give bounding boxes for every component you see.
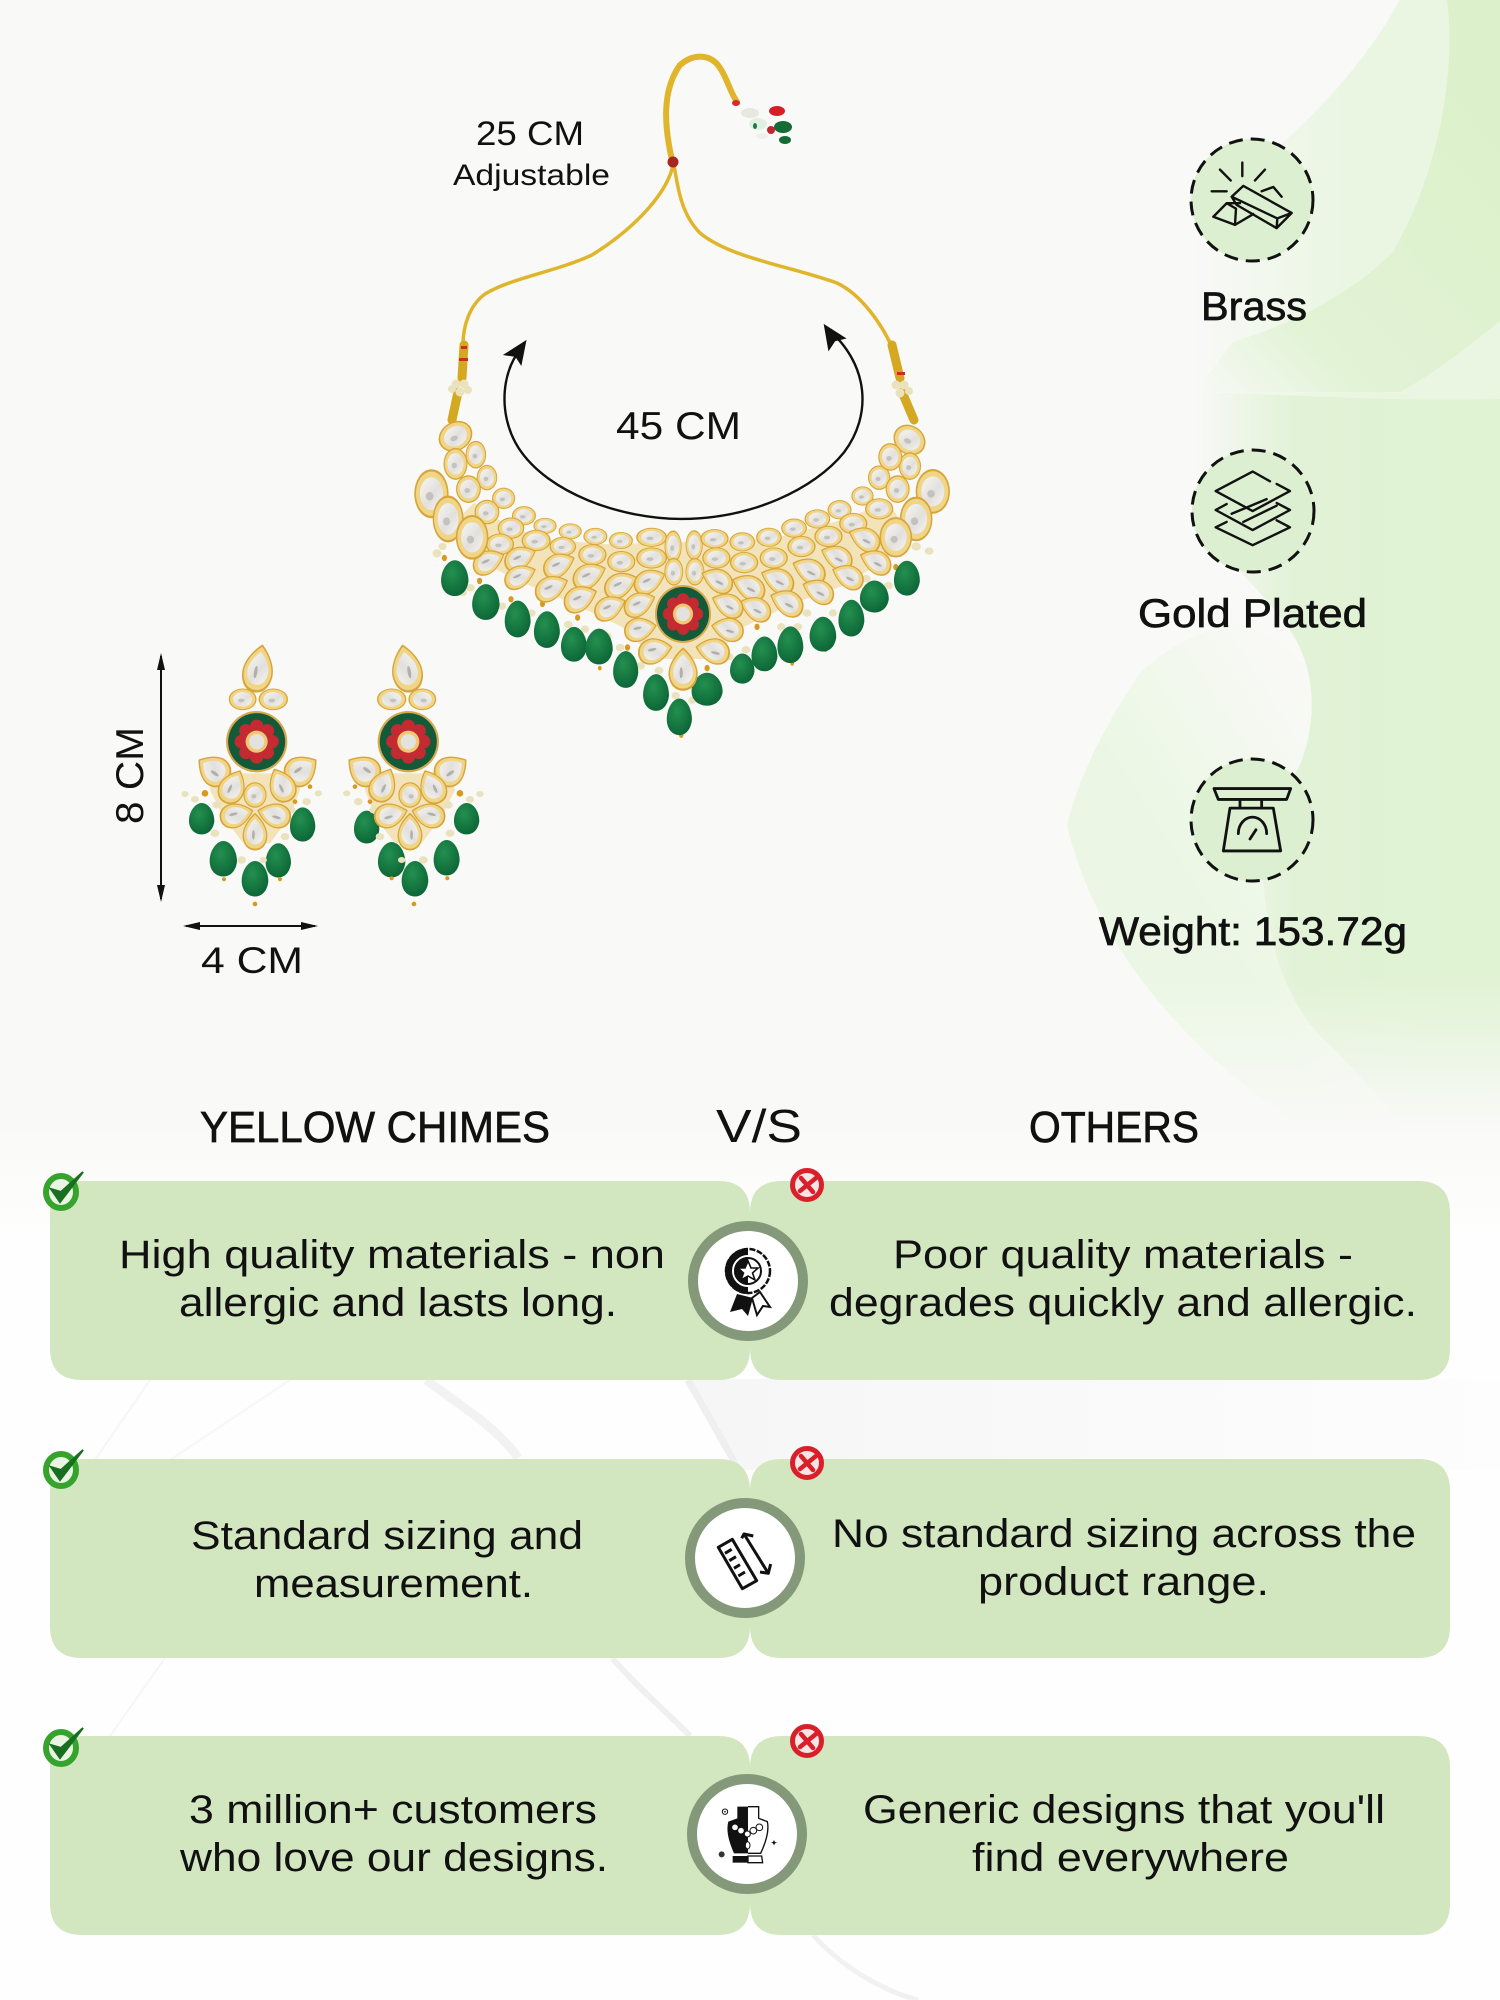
label: 4 CM: 4 CM <box>201 940 303 981</box>
text: no standard sizing <box>832 1512 1416 1604</box>
check icon <box>46 1450 83 1486</box>
cross icon <box>792 1448 822 1478</box>
icon: gold bars <box>1191 139 1313 261</box>
cord tassel <box>732 100 792 144</box>
left earring <box>181 642 325 906</box>
text: no standard sizing: product range. <box>978 1560 1269 1604</box>
icon: ruler and arrow <box>690 1503 800 1613</box>
label: 25 CM: 25 CM <box>476 115 584 153</box>
arrow: 4 CM width <box>183 922 318 930</box>
red slider bead <box>668 156 678 168</box>
comparison row 3 <box>46 1726 1450 1935</box>
arrow: 8 CM height <box>157 653 165 902</box>
icon: layers <box>1192 450 1314 572</box>
text: high quality: High quality materials - non <box>119 1233 665 1277</box>
text: no standard sizing: No standard sizing across the <box>832 1512 1416 1556</box>
cord end pearls <box>448 346 913 398</box>
icon: necklace bust <box>692 1779 802 1889</box>
label: Brass: Brass <box>1201 285 1307 329</box>
text: poor quality: degrades quickly and allergic. <box>829 1281 1417 1325</box>
text: customers <box>179 1788 608 1880</box>
green drop beads <box>441 560 920 735</box>
text: generic designs: find everywhere <box>972 1836 1289 1880</box>
panel: 3 million customers <box>50 1736 750 1935</box>
cross icon <box>792 1170 822 1200</box>
necklace stones (coordinates in scaled group) <box>414 416 950 738</box>
check icon <box>46 1172 83 1208</box>
icon: rosette badge <box>693 1226 803 1336</box>
earrings <box>181 642 484 906</box>
text: customers: 3 million+ customers <box>189 1788 597 1832</box>
text: high quality <box>119 1233 665 1325</box>
heading: V/S: V/S <box>716 1100 802 1152</box>
check icon <box>46 1728 83 1764</box>
necklace with cord, stones and beads <box>414 57 950 738</box>
heading: OTHERS: OTHERS <box>1029 1103 1199 1152</box>
text: generic designs: Generic designs that you'll <box>863 1788 1385 1832</box>
45 CM curved arrow <box>503 324 862 519</box>
comparison row 1 <box>46 1170 1450 1380</box>
label: 45 CM: 45 CM <box>616 405 741 448</box>
text: generic designs <box>863 1788 1385 1880</box>
comparison row 2 <box>46 1448 1450 1658</box>
panel: standard sizing <box>50 1459 750 1658</box>
label: Weight: Weight: 153.72g <box>1099 910 1407 954</box>
heading: YELLOW CHIMES: YELLOW CHIMES <box>200 1103 550 1152</box>
text: poor quality: Poor quality materials - <box>893 1233 1353 1277</box>
text: poor quality <box>829 1233 1417 1325</box>
kundan stones <box>414 416 950 691</box>
cross icon <box>792 1726 822 1756</box>
panel: no standard sizing <box>750 1459 1450 1658</box>
gold backing <box>456 503 911 659</box>
label: 8 CM: 8 CM <box>109 727 152 824</box>
label: Gold Plated: Gold Plated <box>1138 592 1367 636</box>
text: standard sizing <box>191 1514 583 1606</box>
pearls and gold drops <box>433 542 934 738</box>
centre medallion <box>655 585 711 643</box>
lower background swooshes <box>0 1120 1500 2000</box>
right earring <box>340 642 484 906</box>
necklace cord <box>452 57 914 420</box>
label: Adjustable: Adjustable <box>453 159 610 192</box>
text: standard sizing: Standard sizing and <box>191 1514 583 1558</box>
text: high quality: allergic and lasts long. <box>179 1281 617 1325</box>
background green shapes <box>1000 0 1500 1126</box>
panel: others quality <box>750 1181 1450 1380</box>
icon: weighing scale <box>1191 759 1313 881</box>
text: customers: who love our designs. <box>179 1836 608 1880</box>
text: standard sizing: measurement. <box>254 1562 533 1606</box>
panel: generic designs <box>750 1736 1450 1935</box>
panel: yellow chimes quality <box>50 1181 750 1380</box>
